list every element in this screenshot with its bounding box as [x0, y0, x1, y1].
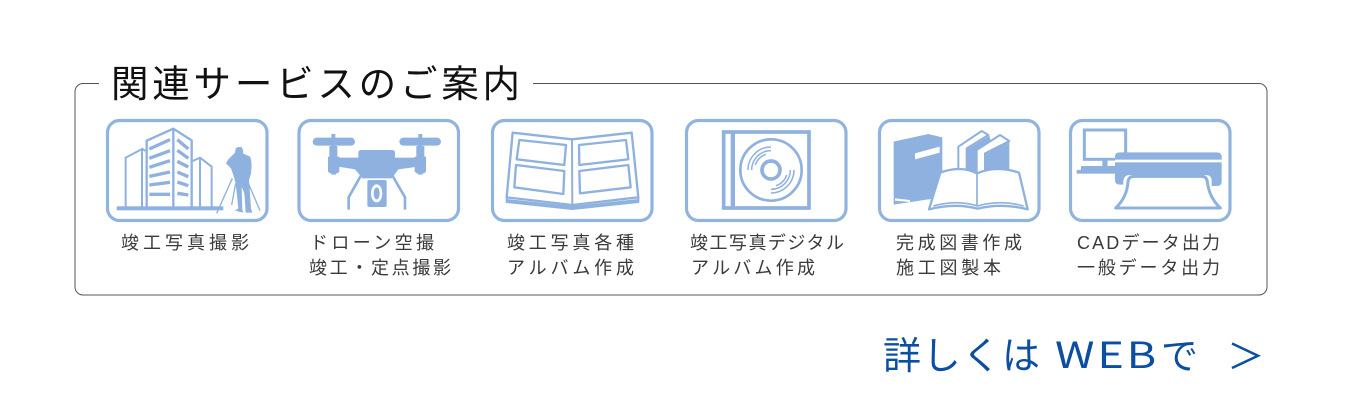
label: site photography: 竣工写真撮影: [121, 233, 249, 253]
label: CAD line 1: CADデータ出力: [1077, 233, 1220, 253]
link: details on the web: [883, 326, 1258, 379]
service: site photography: [108, 120, 267, 253]
icon: open book: [929, 169, 1028, 209]
icon: monitor and plotter: [1077, 130, 1222, 208]
icon frame: photography: [108, 120, 267, 220]
link text: de: で: [1161, 336, 1198, 377]
icon: buildings: [117, 129, 223, 210]
icon: drone: [313, 134, 441, 210]
service: photo albums: [492, 120, 652, 278]
label: album line 1: 竣工写真各種: [507, 233, 634, 253]
label: digital line 1: 竣工写真デジタル: [690, 233, 844, 253]
icon frame: album: [492, 120, 652, 220]
label: digital line 2: アルバム作成: [691, 258, 815, 278]
label: album line 2: アルバム作成: [507, 258, 634, 278]
icon: two standing books: [958, 131, 1009, 175]
service: drone photography: [299, 120, 458, 278]
label: completion line 2: 施工図製本: [896, 258, 1001, 278]
icon: large book: [894, 134, 942, 205]
label: completion and fixed-point: 竣工・定点撮影: [309, 258, 451, 278]
link text: 詳しくは: [883, 336, 1040, 378]
label: CAD line 2: 一般データ出力: [1077, 258, 1220, 278]
service: CAD output: [1070, 120, 1230, 278]
service: digital albums: [686, 120, 846, 278]
label: drone photography: ドローン空撮: [310, 233, 434, 253]
arrow: [1232, 344, 1258, 368]
label: completion line 1: 完成図書作成: [896, 233, 1022, 253]
icon frame: drone: [299, 120, 458, 220]
link text: WEB: WEB: [1055, 326, 1156, 379]
service: completion drawings: [880, 120, 1039, 278]
icon: album: [507, 133, 638, 209]
icon: disc case: [724, 132, 809, 208]
title: 関連サービスのご案内: [111, 63, 520, 105]
icon frame: plotter: [1070, 120, 1230, 220]
icon frame: disc: [686, 120, 846, 220]
panel: services frame: [75, 84, 1267, 295]
icon frame: books: [880, 120, 1039, 220]
icon: photographer with tripod: [217, 147, 260, 213]
